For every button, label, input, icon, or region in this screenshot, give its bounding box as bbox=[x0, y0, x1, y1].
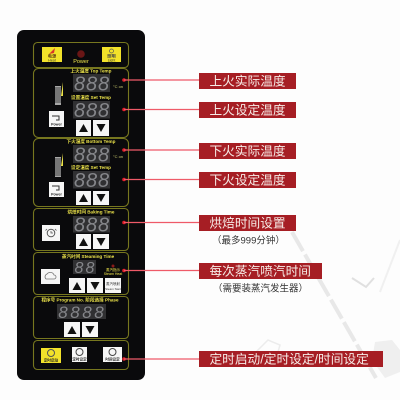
timer set button: 定时设定 bbox=[72, 356, 87, 362]
display: steam: 8 bbox=[75, 260, 84, 277]
callout: top set bbox=[122, 102, 296, 118]
display: bottom actual: 8 bbox=[86, 144, 97, 166]
callout: bottom set bbox=[122, 172, 296, 188]
callout: baking time bbox=[122, 215, 296, 231]
display: bottom set: 8 bbox=[74, 170, 85, 192]
unit: °C on bbox=[113, 84, 123, 89]
up button bbox=[76, 234, 91, 249]
control panel bbox=[17, 30, 145, 380]
steaming label: 蒸汽时间 Steaming Time bbox=[62, 253, 115, 260]
icon: power led bbox=[77, 50, 85, 58]
panel: timers bbox=[34, 340, 128, 370]
panel: top heat bbox=[34, 68, 128, 138]
callout: timers: 定时启动/定时设定/时间设定 bbox=[210, 352, 369, 366]
icon: steam button bbox=[41, 269, 60, 284]
panel: steaming time bbox=[34, 252, 128, 294]
level gauge bbox=[55, 82, 63, 105]
down button bbox=[93, 120, 109, 136]
display: bottom set: 8 bbox=[98, 170, 109, 192]
display: top set: 8 bbox=[98, 100, 109, 122]
callout: top actual bbox=[122, 73, 296, 89]
note: baking time: （最多999分钟） bbox=[212, 234, 285, 246]
down button bbox=[93, 234, 109, 249]
display: bottom set: 8 bbox=[86, 170, 97, 192]
panel: program bbox=[34, 296, 128, 338]
callout: bottom actual bbox=[122, 143, 296, 159]
steam indicator: 蒸汽指示 bbox=[106, 267, 120, 272]
callout: timers bbox=[122, 351, 383, 367]
top temp label: 上火温度 Top Temp bbox=[71, 68, 112, 74]
down button bbox=[82, 322, 98, 337]
display: top set: 8 bbox=[74, 100, 85, 122]
icon: fire button: 电源 bbox=[48, 52, 57, 60]
panel: top switches bbox=[34, 42, 128, 68]
icon: power button: Power bbox=[51, 122, 62, 126]
program label: 程序号 Program No. 阶段选择 Phase bbox=[41, 296, 119, 304]
display: program: 8 bbox=[94, 303, 104, 322]
level gauge bbox=[55, 153, 63, 177]
display: top set: 8 bbox=[86, 100, 97, 122]
clock set button: 时间设定 bbox=[105, 356, 120, 362]
steam button: Steam Start bbox=[105, 287, 121, 291]
callout: bottom actual: 下火实际温度 bbox=[210, 144, 286, 158]
up button bbox=[69, 278, 85, 293]
steam button bbox=[105, 278, 121, 293]
set temp label: 设置温度 Set Temp bbox=[71, 94, 111, 101]
panel: baking time bbox=[34, 208, 128, 250]
display: bottom set bbox=[73, 170, 110, 192]
timer start button: 定时启动 bbox=[44, 358, 59, 362]
display: top actual: 8 bbox=[98, 74, 109, 96]
down button bbox=[87, 278, 103, 293]
display: bottom actual: 8 bbox=[74, 144, 85, 166]
callout: steam time: 每次蒸汽喷汽时间 bbox=[210, 264, 311, 278]
up button bbox=[64, 322, 80, 337]
panel: bottom heat bbox=[34, 138, 128, 206]
icon: light button bbox=[102, 47, 121, 62]
callout: steam time bbox=[122, 263, 322, 279]
icon: light button: 照明 bbox=[107, 54, 116, 60]
display: top actual: 8 bbox=[74, 74, 85, 96]
display: baking: 8 bbox=[86, 214, 97, 236]
callout: top set: 上火设定温度 bbox=[210, 102, 286, 118]
baking time label: 烘焙时间 Baking Time bbox=[68, 208, 115, 216]
note: steam generator: （需要装蒸汽发生器） bbox=[213, 282, 308, 294]
display: top set bbox=[73, 100, 110, 122]
display: program: 8 bbox=[70, 303, 80, 322]
up button bbox=[76, 120, 91, 136]
up button bbox=[76, 191, 91, 205]
steam indicator bbox=[104, 264, 122, 276]
icon: fire button bbox=[42, 47, 62, 62]
callout: top actual: 上火实际温度 bbox=[210, 74, 286, 88]
bottom temp label: 下火温度 Bottom Temp bbox=[67, 138, 116, 145]
display: top actual bbox=[73, 74, 110, 96]
icon: light button: Light bbox=[108, 58, 115, 62]
display: program: 8 bbox=[82, 303, 92, 322]
icon: power button: Power bbox=[51, 192, 62, 196]
display: program bbox=[57, 303, 106, 322]
display: baking: 8 bbox=[74, 214, 85, 236]
callout: bottom set: 下火设定温度 bbox=[210, 172, 286, 188]
display: bottom actual bbox=[73, 144, 110, 166]
steam indicator: Steam Heat bbox=[104, 272, 122, 276]
power label: Power bbox=[73, 59, 89, 65]
display: steam bbox=[73, 260, 96, 277]
set temp label: 设定温度 Set Temp bbox=[71, 164, 111, 171]
steam button: 蒸汽喷射 bbox=[106, 281, 120, 286]
icon: fire button: Heat bbox=[48, 58, 56, 62]
display: steam: 8 bbox=[86, 260, 95, 277]
unit: °C on bbox=[113, 154, 123, 159]
display: top actual: 8 bbox=[86, 74, 97, 96]
display: program: 8 bbox=[58, 303, 68, 322]
display: bottom actual: 8 bbox=[98, 144, 109, 166]
callout: baking time: 烘焙时间设置 bbox=[210, 216, 286, 230]
down button bbox=[93, 191, 109, 205]
display: baking bbox=[73, 214, 110, 236]
icon: alarm button bbox=[42, 225, 60, 241]
display: baking: 8 bbox=[98, 214, 109, 236]
